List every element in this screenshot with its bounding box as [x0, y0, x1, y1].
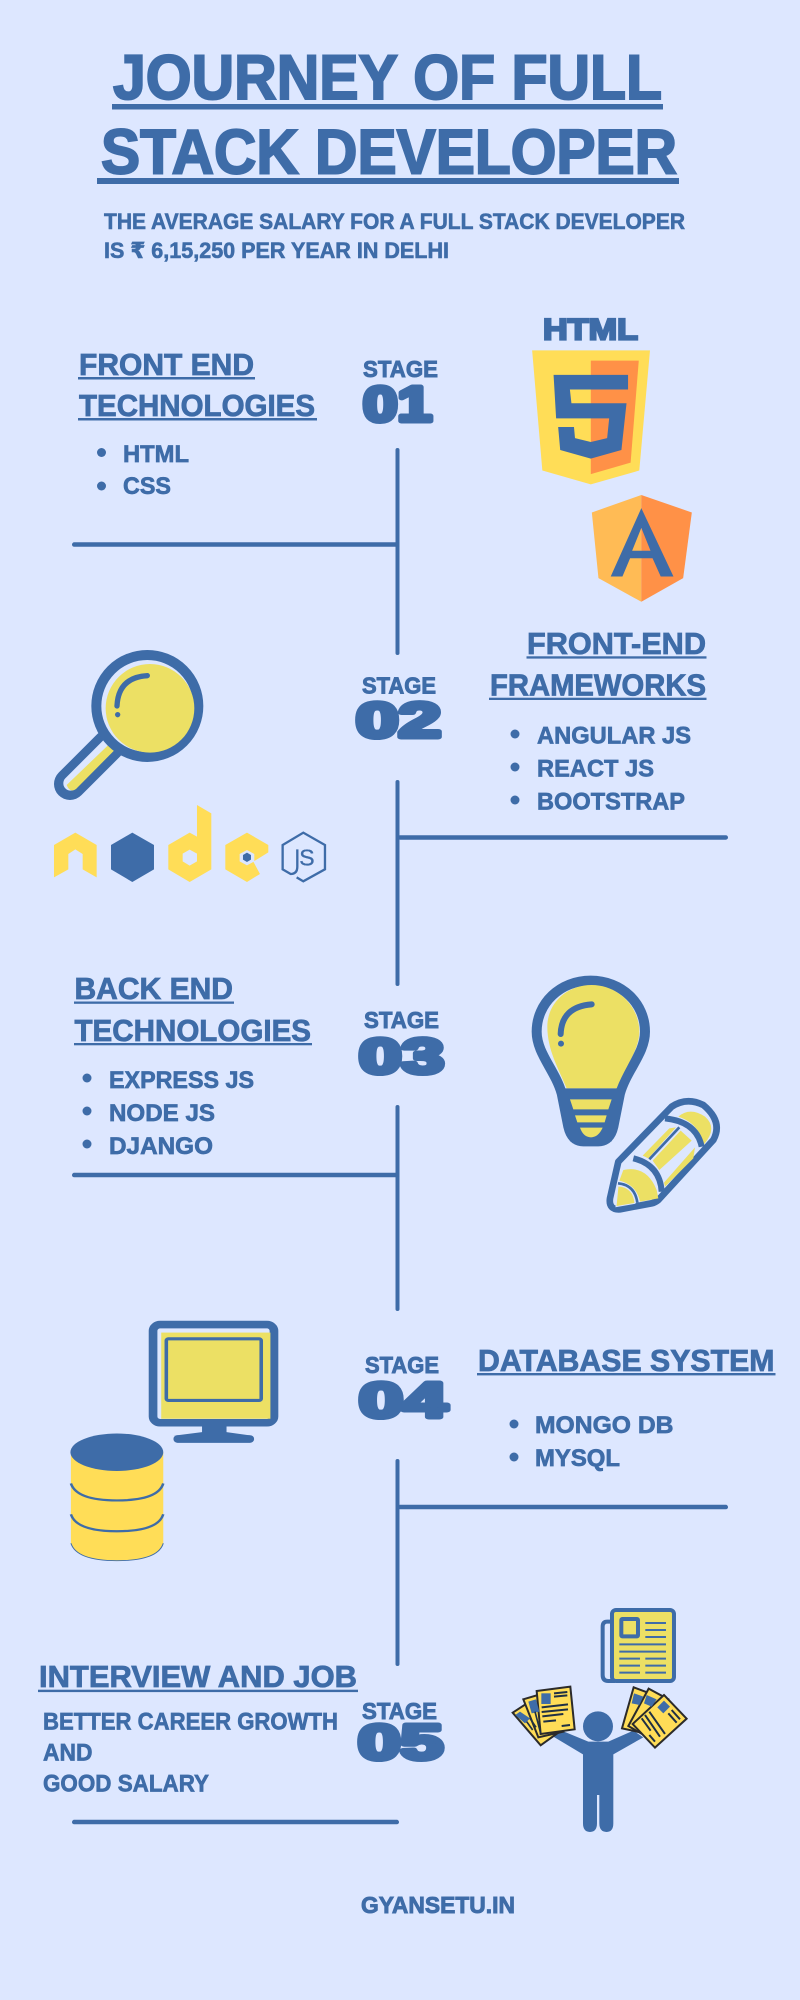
stage 03 label: 03	[359, 1030, 444, 1084]
stage 05 label: 05	[358, 1716, 443, 1770]
left resumes	[513, 1687, 575, 1745]
heading: front-end frameworks	[489, 627, 706, 702]
stage 04 label: STAGE	[365, 1352, 439, 1378]
list: back end: NODE JS	[109, 1100, 215, 1127]
list: html css	[97, 441, 189, 500]
list: back end: EXPRESS JS	[109, 1067, 254, 1094]
stage 04 label: 04	[359, 1374, 447, 1428]
stage 03 label: STAGE	[364, 1007, 439, 1033]
icon: angular logo	[592, 495, 692, 602]
subtitle: average salary: THE AVERAGE SALARY FOR A FULL STACK DEVELOPER	[104, 209, 685, 234]
subtitle: average salary: IS ₹ 6,15,250 PER YEAR IN DELHI	[104, 238, 449, 263]
title: STACK DEVELOPER	[101, 118, 677, 188]
list: back end	[82, 1067, 254, 1160]
stage 04 label	[359, 1352, 447, 1428]
panel: stage 02 front-end frameworks	[54, 627, 728, 882]
stage 03 label	[359, 1007, 444, 1084]
stage 02 label	[356, 673, 441, 748]
list: databases: MYSQL	[535, 1445, 620, 1472]
horizontal rule	[398, 835, 728, 840]
list: databases	[510, 1412, 674, 1472]
icon: monitor	[153, 1325, 274, 1443]
list: frameworks: REACT JS	[537, 756, 654, 782]
stage 05 label: STAGE	[362, 1698, 437, 1724]
horizontal rule	[72, 1173, 398, 1177]
panel: stage 01 front end technologies	[72, 314, 692, 602]
text: better career growth: BETTER CAREER GROWTH	[43, 1708, 338, 1736]
title	[97, 43, 679, 188]
icon: html5 logo	[532, 314, 650, 484]
stage 01 label: STAGE	[363, 356, 438, 382]
stage 01 label: 01	[363, 378, 432, 432]
stage 01 label	[363, 356, 438, 432]
heading: back end technologies	[74, 972, 312, 1048]
list: html css: HTML	[123, 441, 189, 468]
text: better career growth: AND	[43, 1740, 92, 1766]
list: back end: DJANGO	[109, 1133, 213, 1160]
panel: stage 03 back end technologies	[72, 972, 717, 1209]
icon: pencil	[610, 1101, 717, 1209]
list: frameworks	[510, 723, 691, 816]
heading: database system: DATABASE SYSTEM	[478, 1344, 774, 1378]
text: better career growth	[43, 1708, 338, 1798]
text: better career growth: GOOD SALARY	[43, 1770, 209, 1798]
panel: stage 04 database system	[70, 1325, 776, 1561]
heading: front end technologies: FRONT END	[79, 348, 254, 382]
footer: gyansetu.in: GYANSETU.IN	[361, 1892, 515, 1918]
list: frameworks: BOOTSTRAP	[537, 788, 685, 816]
heading: front-end frameworks: FRONT-END	[527, 627, 706, 661]
title: JOURNEY OF FULL	[113, 43, 662, 113]
heading: front end technologies: TECHNOLOGIES	[79, 389, 315, 423]
horizontal rule	[398, 1505, 728, 1509]
icon: light bulb	[537, 981, 645, 1141]
subtitle: average salary	[104, 209, 685, 263]
icon: magnifying glass	[67, 655, 198, 790]
right resumes	[622, 1687, 687, 1748]
heading: front end technologies	[78, 348, 317, 423]
list: frameworks: ANGULAR JS	[537, 723, 691, 750]
horizontal rule	[72, 1820, 399, 1824]
heading: interview and job: INTERVIEW AND JOB	[39, 1660, 357, 1694]
panel: stage 05 interview and job	[38, 1610, 687, 1832]
stage 02 label: STAGE	[362, 673, 436, 699]
icon: node js logo: S	[299, 844, 315, 870]
icon: database cylinder	[70, 1433, 163, 1561]
heading: back end technologies: BACK END	[74, 972, 233, 1006]
timeline: vertical connectors	[396, 448, 400, 1666]
icon: html5 logo: HTML	[543, 314, 638, 346]
horizontal rule	[72, 542, 398, 547]
icon: newspaper	[603, 1610, 674, 1681]
stage 05 label	[358, 1698, 443, 1770]
list: html css: CSS	[123, 473, 171, 500]
icon: person holding resumes	[513, 1687, 687, 1832]
heading: front-end frameworks: FRAMEWORKS	[490, 668, 706, 702]
stage 02 label: 02	[356, 694, 441, 748]
icon: node js logo	[54, 805, 325, 882]
list: databases: MONGO DB	[535, 1412, 674, 1439]
heading: back end technologies: TECHNOLOGIES	[74, 1014, 311, 1048]
person	[553, 1711, 643, 1832]
